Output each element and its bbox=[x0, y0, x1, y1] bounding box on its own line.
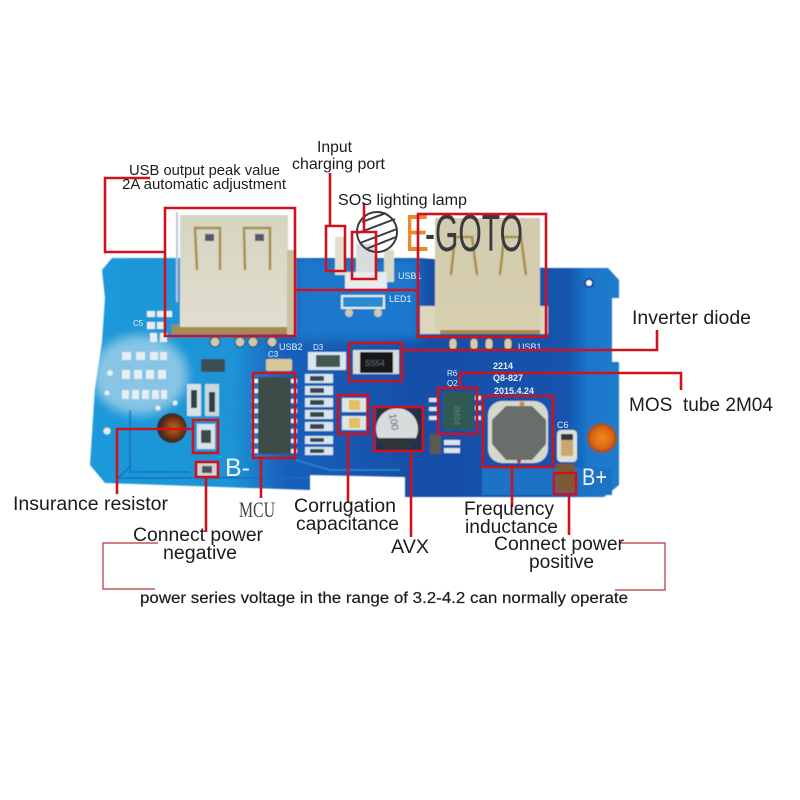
red callout frames and leaders bbox=[105, 173, 681, 537]
copper traces bbox=[118, 385, 550, 490]
callout: sos lamp bbox=[352, 203, 376, 279]
callout: positive bbox=[554, 473, 576, 535]
voltage note bracket bbox=[103, 543, 665, 590]
capacitor c6 bbox=[557, 430, 577, 462]
board silkscreen labels: B- bbox=[225, 454, 250, 482]
left usb solder pads bbox=[210, 337, 277, 347]
label: connect power negative bbox=[133, 525, 264, 564]
label: connect power negative: Connect power bbox=[133, 525, 264, 546]
resistor bank bbox=[305, 374, 333, 455]
board silkscreen labels: USB1 bbox=[518, 342, 542, 352]
callout: inverter diode bbox=[349, 330, 657, 381]
lighter pour under B+ bbox=[482, 468, 612, 495]
board silkscreen labels: R6 bbox=[447, 369, 458, 378]
callout: usb output bbox=[105, 178, 295, 336]
label: inverter diode: Inverter diode bbox=[632, 308, 751, 329]
callout: insurance resistor bbox=[117, 420, 218, 494]
callout: avx bbox=[374, 407, 423, 537]
board silkscreen labels: D3 bbox=[313, 343, 324, 352]
label: connect power positive bbox=[494, 534, 625, 573]
mcu chip bbox=[252, 377, 297, 454]
label: corrugation capacitance: Corrugation bbox=[294, 496, 396, 517]
left silk pads bbox=[104, 311, 178, 434]
callout: negative bbox=[196, 462, 218, 532]
watermark: e-goto logo bbox=[357, 205, 523, 263]
callout: inductor bbox=[483, 396, 553, 507]
label: usb output: 2A automatic adjustment bbox=[122, 177, 286, 193]
label: usb output bbox=[122, 163, 286, 193]
inverter diode chip: SS54 bbox=[365, 359, 385, 368]
electrolytic capacitor: 100 bbox=[386, 413, 400, 432]
b+ pad bbox=[556, 464, 575, 492]
watermark globe bbox=[357, 212, 397, 252]
upper centre lighter pour bbox=[296, 258, 420, 340]
mounting hole: top right bbox=[585, 279, 593, 287]
board silkscreen labels: USB2 bbox=[279, 342, 303, 352]
label: input charging port: charging port bbox=[292, 156, 386, 173]
callout: corrugation capacitance bbox=[338, 395, 368, 503]
callout: right usb bbox=[418, 214, 546, 337]
label: sos lamp: SOS lighting lamp bbox=[338, 192, 467, 209]
board silkscreen labels bbox=[133, 271, 607, 491]
transistor q1 area bbox=[187, 359, 225, 416]
label: corrugation capacitance bbox=[294, 496, 399, 535]
mos tube chip bbox=[429, 392, 481, 430]
board silkscreen labels: C6 bbox=[557, 420, 569, 430]
usb output port: right bbox=[420, 218, 548, 334]
callout: mcu bbox=[253, 373, 295, 498]
small components near mos bbox=[430, 434, 460, 454]
sos led bbox=[342, 296, 384, 317]
b- pad bbox=[197, 463, 217, 476]
circuit board bbox=[90, 212, 619, 497]
label: frequency inductance: Frequency bbox=[464, 499, 554, 520]
left glare bbox=[92, 335, 188, 415]
mounting hole: right bbox=[587, 423, 617, 453]
electrolytic capacitor bbox=[376, 408, 422, 451]
board silkscreen labels: B+ bbox=[582, 464, 607, 491]
label: mos tube: MOS tube 2M04 bbox=[629, 395, 773, 416]
label: corrugation capacitance: capacitance bbox=[296, 514, 399, 535]
corrugation capacitors bbox=[342, 398, 366, 430]
right usb solder pads bbox=[449, 338, 512, 350]
label: input charging port: Input bbox=[317, 139, 353, 156]
voltage note: power series voltage in the range of 3.2-4.2 can normally operate bbox=[140, 590, 628, 607]
inverter diode chip bbox=[353, 350, 399, 374]
mos tube chip: 2M04 bbox=[452, 405, 461, 426]
link between usb ports bbox=[295, 289, 418, 291]
insurance resistor bbox=[197, 424, 215, 449]
board silkscreen labels: USB1 bbox=[398, 271, 422, 281]
infographic: annotated power bank circuit board bbox=[14, 141, 772, 607]
board silkscreen labels: 2214 bbox=[493, 361, 513, 371]
board silkscreen labels: C5 bbox=[133, 319, 144, 328]
board silkscreen labels: C3 bbox=[268, 350, 279, 359]
micro usb charging port bbox=[335, 237, 394, 289]
board silkscreen labels: Q2 bbox=[447, 379, 458, 388]
diode d3 bbox=[308, 352, 346, 370]
watermark letter e: E bbox=[405, 205, 429, 263]
usb output port: left bbox=[172, 212, 296, 335]
capacitor c3 bbox=[266, 359, 292, 371]
board silkscreen labels: 2015.4.24 bbox=[494, 386, 534, 396]
label: avx: AVX bbox=[391, 537, 429, 558]
label: usb output: USB output peak value bbox=[129, 163, 280, 179]
label: connect power positive: positive bbox=[529, 552, 594, 573]
callout: input port bbox=[326, 173, 345, 271]
mounting hole: left bbox=[157, 413, 187, 443]
frequency inductor bbox=[488, 401, 548, 463]
label: input charging port bbox=[292, 139, 386, 173]
label: frequency inductance bbox=[464, 499, 558, 538]
label: connect power positive: Connect power bbox=[494, 534, 625, 555]
board silkscreen labels: Q8-827 bbox=[493, 373, 523, 383]
callout: mos tube bbox=[438, 373, 681, 434]
label: insurance resistor: Insurance resistor bbox=[13, 494, 169, 515]
board silkscreen labels: LED1 bbox=[389, 294, 412, 304]
label: frequency inductance: inductance bbox=[465, 517, 558, 538]
watermark word goto: -GOTO bbox=[425, 205, 523, 263]
label: mcu: MCU bbox=[239, 497, 275, 522]
board outline bbox=[90, 258, 619, 497]
label: connect power negative: negative bbox=[163, 543, 237, 564]
